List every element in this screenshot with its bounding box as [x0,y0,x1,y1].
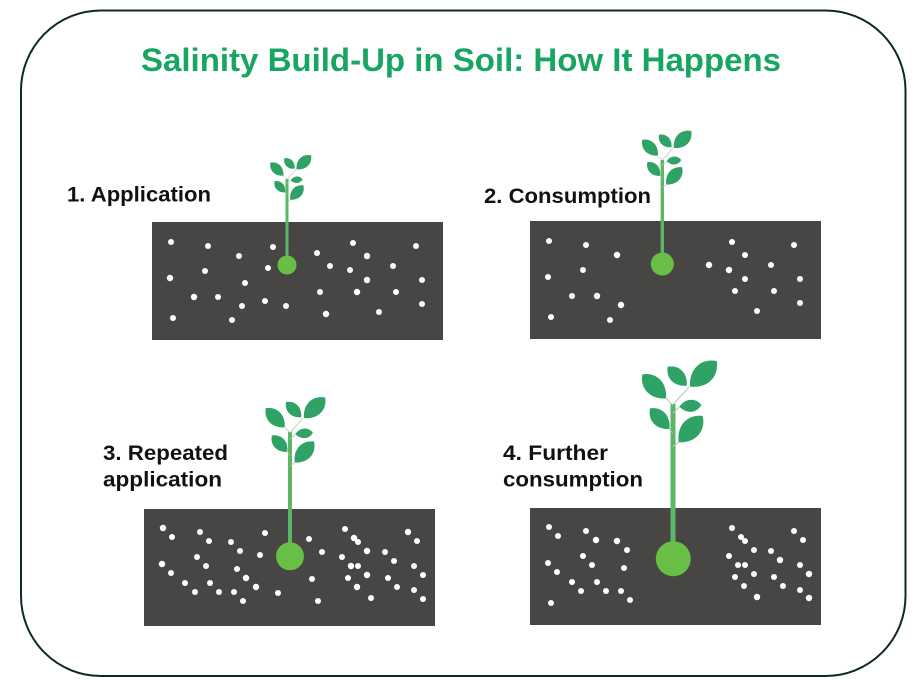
heading: 4. Further consumption: 4. Further [503,442,608,465]
soil block [144,509,435,626]
panel: 3. Repeated application [103,397,435,626]
soil block [152,222,443,340]
panel: 2. Consumption [484,131,821,339]
salt particles [545,238,803,323]
panel: 4. Further consumption [503,360,821,625]
salt particles [167,239,425,323]
icon: plant [642,131,692,276]
heading: 1. Application: 1. Application [67,184,211,206]
heading: 3. Repeated application: application [103,468,222,492]
heading: 4. Further consumption: consumption [503,468,643,492]
heading: 3. Repeated application: 3. Repeated [103,442,228,465]
panel: 1. Application [67,155,443,340]
icon: plant [265,397,325,570]
salt particles [545,524,812,606]
soil block [530,221,821,339]
title: Salinity Build-Up in Soil: How It Happens [141,42,781,78]
icon: plant [642,360,717,576]
salt particles [159,525,426,604]
heading: 2. Consumption: 2. Consumption [484,185,651,208]
icon: plant [270,155,311,274]
soil block [530,508,821,625]
